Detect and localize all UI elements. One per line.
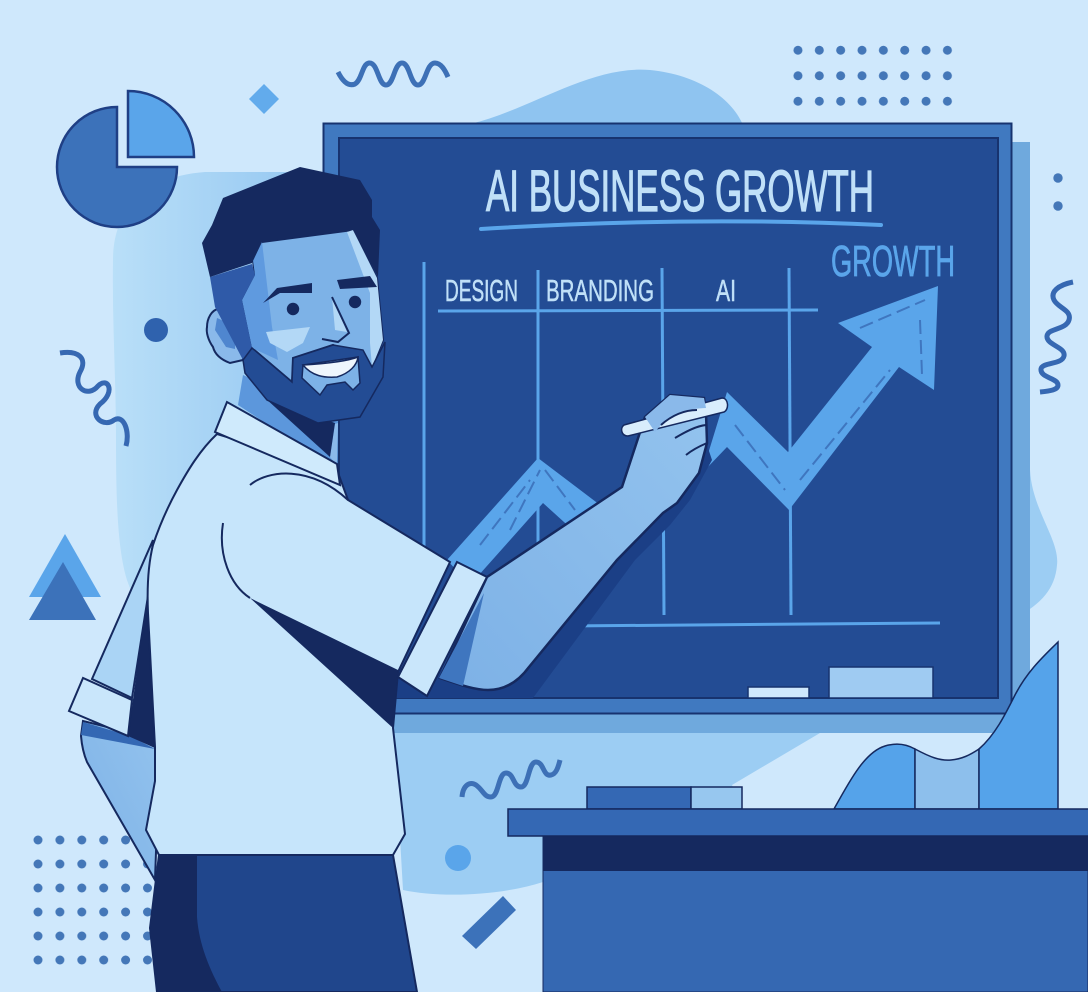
face highlight — [347, 230, 383, 367]
fingers — [645, 395, 707, 455]
desk top — [508, 809, 1088, 836]
chalkboard — [324, 124, 1030, 733]
column labels: DESIGN — [445, 273, 518, 308]
dot grid: bottom left — [27, 828, 158, 972]
title underline — [481, 221, 881, 229]
desk — [508, 787, 1088, 992]
sideburn — [210, 264, 255, 360]
hand and forearm shadow on board — [392, 445, 712, 698]
trousers — [150, 855, 417, 992]
dots: right of board — [1053, 173, 1063, 211]
shirt sleeve cuff — [398, 562, 487, 696]
icon: diamond — [249, 84, 279, 114]
face shade — [242, 242, 278, 360]
dot: left — [144, 318, 168, 342]
forearm shade — [439, 593, 484, 686]
shirt torso — [146, 434, 450, 855]
eyes — [287, 303, 299, 315]
dot grid: top right — [787, 38, 958, 114]
pointing arm — [440, 395, 707, 690]
desk body — [543, 834, 1088, 992]
growth label: GROWTH — [831, 237, 955, 286]
face — [242, 230, 383, 382]
books on desk — [587, 787, 742, 809]
squiggle: right — [1040, 282, 1073, 392]
neck — [238, 375, 338, 470]
person — [69, 167, 728, 992]
cheek — [266, 327, 310, 352]
collar — [215, 402, 340, 485]
chalk — [622, 398, 728, 436]
desk shadow — [543, 836, 1088, 871]
back sleeve — [92, 540, 153, 698]
sleeve cuff — [69, 678, 132, 736]
dot: bottom centre — [445, 845, 471, 871]
icon: triangles — [29, 534, 101, 620]
squiggle: left — [60, 352, 127, 446]
growth arrow — [447, 286, 938, 585]
eraser and chalk on tray — [748, 667, 933, 698]
small area chart on desk — [834, 642, 1058, 809]
board surface — [339, 138, 998, 698]
squiggle: bottom centre — [462, 760, 560, 797]
eyebrows — [263, 276, 377, 303]
column labels: BRANDING — [546, 273, 654, 308]
board shadow — [390, 142, 1030, 733]
beard — [243, 342, 385, 423]
board frame — [324, 124, 1012, 714]
chin patch — [302, 357, 360, 395]
back shadow — [128, 590, 155, 748]
squiggle: top — [338, 63, 448, 85]
icon: pie chart — [57, 91, 194, 227]
back arm — [81, 721, 160, 880]
column labels: AI — [716, 273, 736, 308]
nose highlight — [332, 297, 347, 332]
background blobs — [113, 70, 1057, 895]
nose — [322, 297, 349, 342]
mouth — [303, 357, 358, 377]
ear — [207, 308, 245, 363]
chart grid lines — [424, 262, 940, 626]
under-arm shadow — [250, 598, 398, 728]
hair — [202, 167, 380, 277]
icon: bar shape — [462, 896, 516, 949]
column labels — [445, 273, 736, 308]
shirt fold lines — [222, 474, 348, 598]
